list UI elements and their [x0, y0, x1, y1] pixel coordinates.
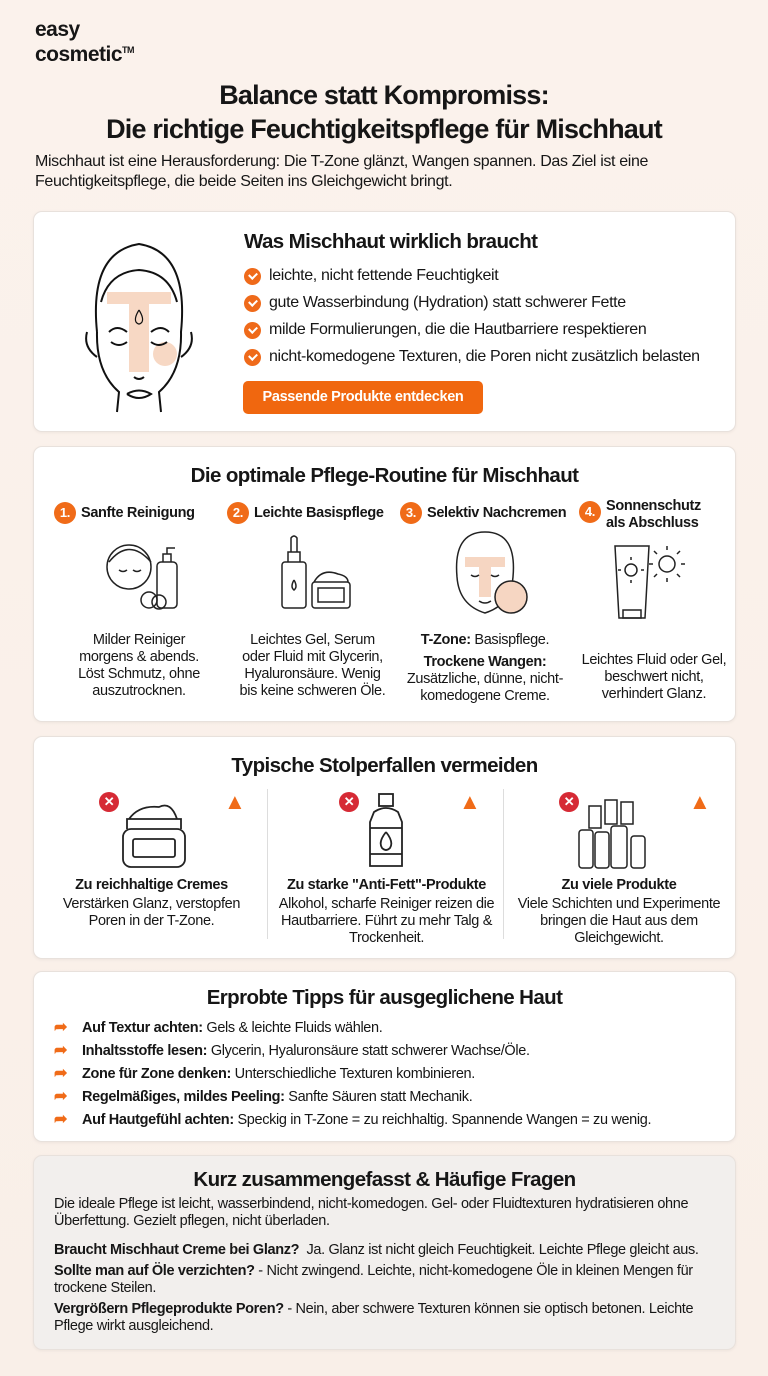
step 4: 4.	[585, 504, 595, 519]
pitfall 3: Viele Schichten und Experimente bringen die Haut aus dem Gleichgewicht.	[518, 896, 720, 946]
tips list: Regelmäßiges, mildes Peeling: Sanfte Säuren statt Mechanik.	[82, 1089, 472, 1105]
logo	[35, 18, 134, 66]
button	[243, 381, 483, 414]
pitfall 1: Zu reichhaltige Cremes	[75, 877, 228, 893]
tips list: ➦	[54, 1019, 67, 1036]
heading: Typische Stolperfallen vermeiden	[231, 754, 538, 777]
tips list: Zone für Zone denken: Unterschiedliche Texturen kombinieren.	[82, 1066, 475, 1082]
checklist: milde Formulierungen, die die Hautbarriere respektieren	[269, 321, 646, 338]
step 4: als Abschluss	[606, 515, 698, 531]
title	[106, 80, 662, 144]
step 2: Leichte Basispflege	[254, 505, 384, 521]
panel: routine	[33, 446, 736, 722]
faq	[54, 1242, 699, 1334]
pitfall 1: Verstärken Glanz, verstopfen Poren in der T-Zone.	[63, 896, 240, 929]
pitfall 3: Zu viele Produkte	[562, 877, 676, 893]
heading: Erprobte Tipps für ausgeglichene Haut	[207, 986, 562, 1009]
panel: what combination skin needs	[33, 211, 736, 432]
tips list: ➦	[54, 1042, 67, 1059]
checklist: leichte, nicht fettende Feuchtigkeit	[269, 267, 498, 284]
tips list: ➦	[54, 1065, 67, 1082]
step 2	[227, 502, 385, 699]
intro text: Mischhaut ist eine Herausforderung: Die T-Zone glänzt, Wangen spannen. Das Ziel ist eine Feuchtigkeitspflege, die beide Seiten ins Gleichgewicht bringt.	[35, 153, 648, 190]
tips list: Auf Hautgefühl achten: Speckig in T-Zone = zu reichhaltig. Spannende Wangen = zu wenig.	[82, 1112, 651, 1128]
pitfall 1: ▲	[224, 789, 245, 814]
pitfall 2: ✕	[344, 794, 354, 809]
faq: Braucht Mischhaut Creme bei Glanz? Ja. Glanz ist nicht gleich Feuchtigkeit. Leichte Pflege gleicht aus.	[54, 1242, 699, 1258]
checklist: nicht-komedogene Texturen, die Poren nicht zusätzlich belasten	[269, 348, 700, 365]
title: Die richtige Feuchtigkeitspflege für Mischhaut	[106, 114, 662, 144]
icon: face with T-zone	[85, 243, 193, 412]
pitfall 2: Zu starke "Anti-Fett"-Produkte	[287, 877, 486, 893]
step 3: 3.	[406, 505, 416, 520]
tips list: Auf Textur achten: Gels & leichte Fluids wählen.	[82, 1020, 382, 1036]
step 4: Leichtes Fluid oder Gel, beschwert nicht, verhindert Glanz.	[582, 652, 726, 702]
step 3: Selektiv Nachcremen	[427, 505, 566, 521]
button: Passende Produkte entdecken	[263, 389, 463, 405]
heading: Die optimale Pflege-Routine für Mischhaut	[191, 464, 578, 487]
tips list	[54, 1019, 651, 1128]
pitfall 3: ▲	[689, 789, 710, 814]
pitfall 1	[63, 789, 245, 929]
faq: Vergrößern Pflegeprodukte Poren? - Nein, aber schwere Texturen können sie optisch betonen. Leichte Pflege wirkt ausgleichend.	[54, 1301, 693, 1334]
pitfall 2: ▲	[459, 789, 480, 814]
pitfall 3	[518, 789, 720, 946]
tips list: ➦	[54, 1088, 67, 1105]
panel: tips	[33, 971, 736, 1142]
panel: summary & FAQ	[33, 1155, 736, 1350]
checklist: gute Wasserbindung (Hydration) statt schwerer Fette	[269, 294, 626, 311]
step 4	[579, 498, 726, 702]
step 2: Leichtes Gel, Serum oder Fluid mit Glycerin, Hyaluronsäure. Wenig bis keine schweren Öle.	[240, 632, 385, 699]
faq: Sollte man auf Öle verzichten? - Nicht zwingend. Leichte, nicht-komedogene Öle in kleinen Mengen für trockene Steilen.	[54, 1263, 693, 1296]
heading: Kurz zusammengefasst & Häufige Fragen	[193, 1168, 576, 1191]
pitfall 1: ✕	[104, 794, 114, 809]
tips list: ➦	[54, 1111, 67, 1128]
step 3	[400, 502, 566, 704]
step 1: Sanfte Reinigung	[81, 505, 195, 521]
pitfall 2	[278, 789, 494, 946]
step 1	[54, 502, 200, 699]
step 2: 2.	[233, 505, 243, 520]
checklist	[244, 267, 700, 366]
step 3: T-Zone: Basispflege. Trockene Wangen: Zusätzliche, dünne, nicht-komedogene Creme.	[407, 632, 563, 704]
pitfall 2: Alkohol, scharfe Reiniger reizen die Hautbarriere. Führt zu mehr Talg & Trockenheit.	[279, 896, 494, 946]
heading: Was Mischhaut wirklich braucht	[244, 230, 537, 253]
panel: pitfalls	[33, 736, 736, 959]
step 1: 1.	[60, 505, 70, 520]
tips list: Inhaltsstoffe lesen: Glycerin, Hyaluronsäure statt schwerer Wachse/Öle.	[82, 1043, 530, 1059]
step 1: Milder Reiniger morgens & abends. Löst Schmutz, ohne auszutrocknen.	[78, 632, 200, 699]
logo: cosmeticTM	[35, 43, 134, 66]
summary text: Die ideale Pflege ist leicht, wasserbindend, nicht-komedogen. Gel- oder Fluidtexturen hydratisieren ohne Überfettung. Gezielt pflegen, nicht überladen.	[54, 1196, 688, 1229]
step 4: Sonnenschutz	[606, 498, 701, 514]
title: Balance statt Kompromiss:	[219, 80, 549, 110]
logo: easy	[35, 18, 80, 41]
pitfall 3: ✕	[564, 794, 574, 809]
